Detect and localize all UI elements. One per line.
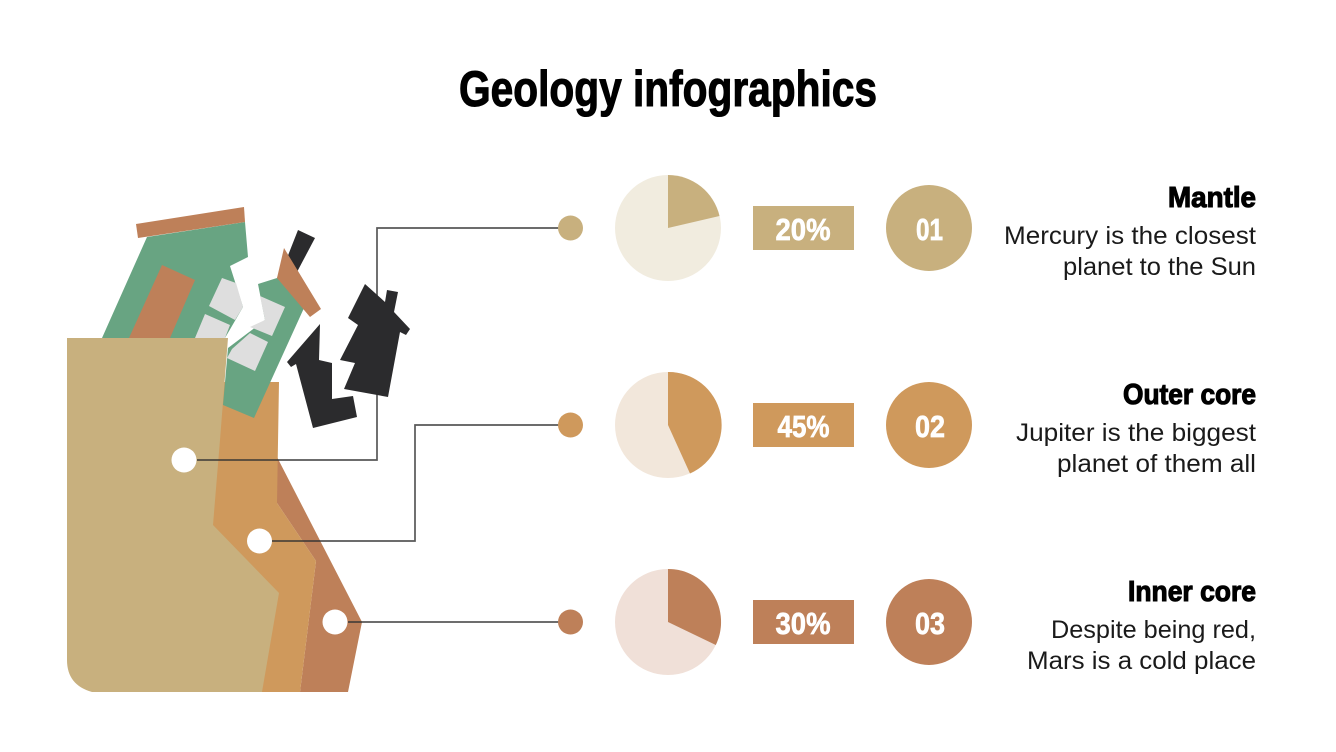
- row 2: outer core: [558, 372, 1256, 478]
- title: Geology infographics: [459, 61, 877, 117]
- number badge: [886, 382, 972, 468]
- icon: black house left piece: [287, 324, 357, 428]
- text block: [1004, 182, 1256, 281]
- text block: planet to the Sun: [1063, 253, 1256, 281]
- text block: Jupiter is the biggest: [1016, 419, 1256, 447]
- text block: Mars is a cold place: [1027, 647, 1256, 675]
- sand mantle layer: [67, 338, 279, 692]
- text block: planet of them all: [1057, 450, 1256, 478]
- percentage label: 20%: [776, 212, 830, 247]
- text block: Inner core: [1128, 576, 1256, 608]
- icon: chimney of green house: [287, 230, 315, 272]
- icon: black house right piece: [340, 284, 410, 397]
- connector end dot: [558, 412, 583, 438]
- pie chart 20%: [615, 175, 721, 281]
- pie chart 45%: [615, 372, 722, 478]
- text block: [1027, 576, 1256, 675]
- connector lines: [197, 228, 560, 622]
- percentage label: [753, 600, 854, 644]
- icon: green house left piece: [102, 207, 248, 338]
- number badge: 01: [916, 212, 943, 247]
- text block: Mercury is the closest: [1004, 222, 1256, 250]
- percentage label: [753, 206, 854, 250]
- text block: Outer core: [1123, 379, 1256, 411]
- text block: Mantle: [1168, 182, 1256, 214]
- number badge: 03: [915, 606, 945, 641]
- icon: green house right piece: [223, 248, 321, 418]
- orange outer core layer: [200, 382, 316, 692]
- percentage label: 45%: [778, 409, 830, 444]
- illustration: earth layers with broken green house: [67, 207, 362, 692]
- number badge: [886, 579, 972, 665]
- row 1: mantle: [558, 175, 1256, 281]
- percentage label: [753, 403, 854, 447]
- pie chart 30%: [615, 569, 721, 675]
- number badge: 02: [915, 409, 945, 444]
- percentage label: 30%: [776, 606, 830, 641]
- text block: Despite being red,: [1051, 616, 1256, 644]
- connector end dot: [558, 610, 583, 634]
- text block: [1016, 379, 1256, 478]
- row 3: inner core: [558, 569, 1256, 675]
- connector end dot: [558, 216, 583, 240]
- number badge: [886, 185, 972, 271]
- terracotta inner core layer: [277, 457, 362, 692]
- layer marker dots: [172, 448, 348, 634]
